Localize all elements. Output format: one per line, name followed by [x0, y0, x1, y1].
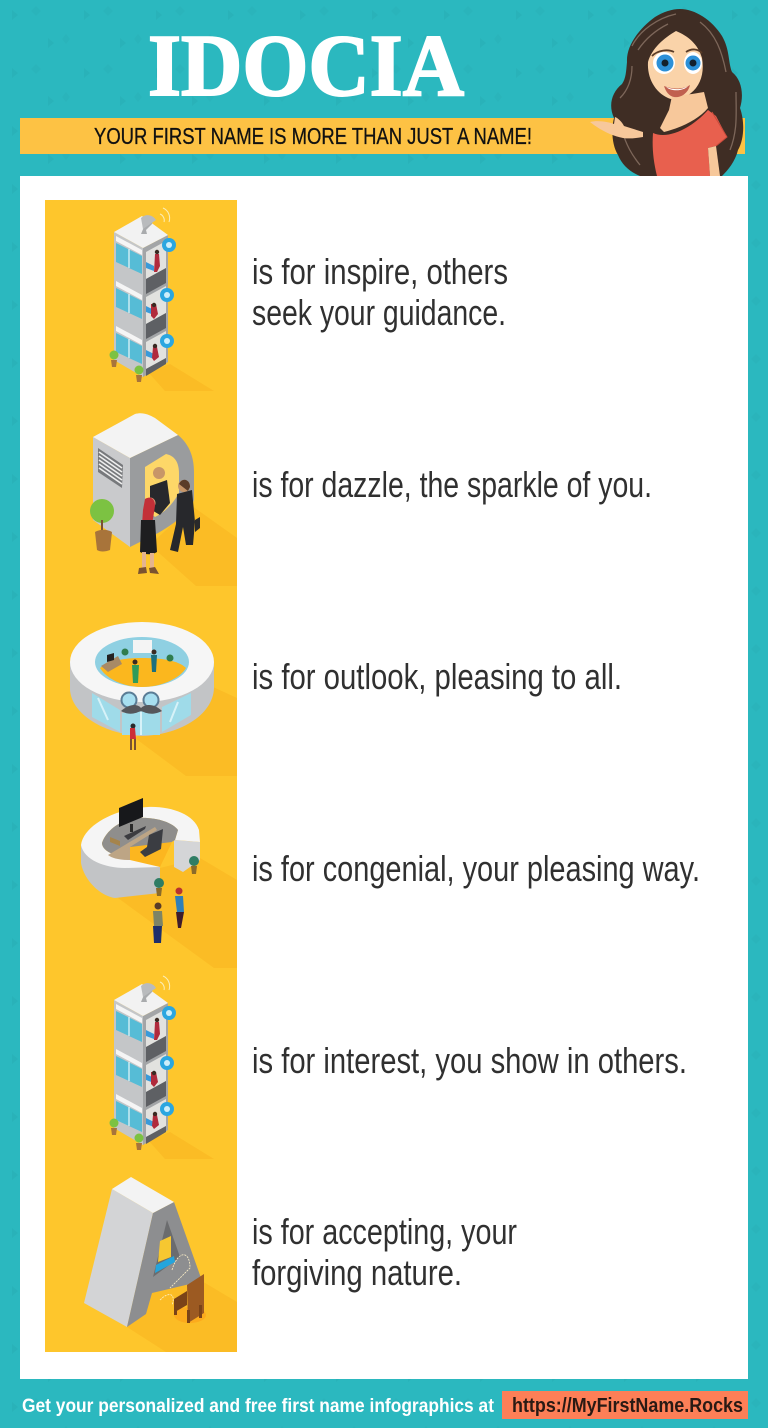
text block: I: is for inspire, others	[252, 251, 508, 292]
text block: I	[252, 251, 508, 333]
panel: white content card	[20, 176, 748, 1379]
text block: A: is for accepting, your	[252, 1211, 517, 1252]
icon: letter D office building with people	[90, 413, 237, 586]
text block: I: seek your guidance.	[252, 292, 506, 333]
icon: letter O ring building with glasses and mustache	[70, 622, 237, 776]
footer call to action: Get your personalized and free first name infographics at	[22, 1396, 495, 1417]
text block: D: is for dazzle, the sparkle of you.	[252, 464, 652, 505]
icon: cartoon woman presenting	[590, 9, 743, 176]
icon: letter I office tower repeat	[110, 976, 214, 1159]
icon: letter C reception desk with visitors	[81, 798, 237, 968]
title: IDOCIA	[148, 18, 464, 115]
icon: letter A building with desk and chair	[84, 1177, 237, 1352]
text block: A: forgiving nature.	[252, 1252, 462, 1293]
footer url badge: https://MyFirstName.Rocks	[512, 1395, 743, 1417]
panel: yellow illustration column	[45, 200, 237, 1352]
subtitle banner: YOUR FIRST NAME IS MORE THAN JUST A NAME!	[94, 123, 532, 149]
text block: A	[252, 1211, 517, 1293]
text block: O: is for outlook, pleasing to all.	[252, 656, 622, 697]
icon: letter I office tower	[110, 208, 214, 391]
subtitle banner	[20, 118, 745, 154]
